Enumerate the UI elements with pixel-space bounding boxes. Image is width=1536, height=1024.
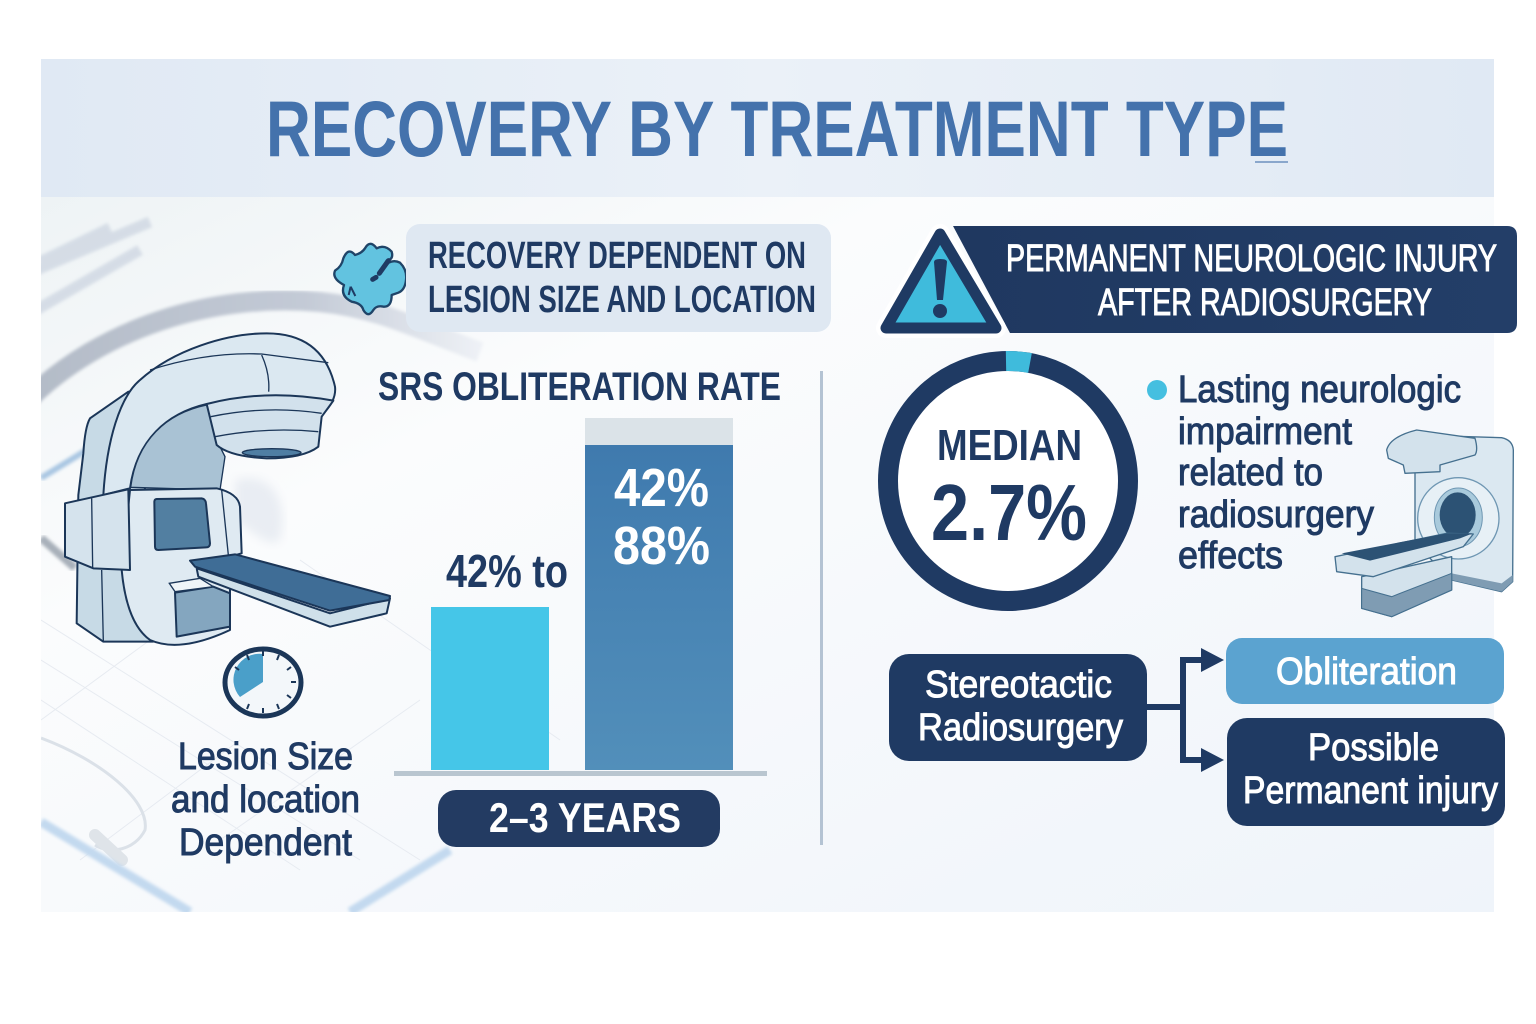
icon: linear accelerator [65, 333, 390, 645]
label: lesion size and location dependent: Dependent [179, 822, 352, 864]
panel: body background [30, 197, 1494, 912]
donut chart: median 2.7% [888, 361, 1128, 601]
flow box: stereotactic radiosurgery: Radiosurgery [918, 707, 1123, 749]
bullet text: lasting neurologic impairment [1147, 369, 1461, 577]
bar: higher value [585, 418, 733, 770]
panel: recovery dependent callout: RECOVERY DEPENDENT ON [428, 235, 806, 277]
icon: warning triangle [886, 234, 996, 328]
bullet text: lasting neurologic impairment: effects [1178, 535, 1283, 577]
pill: 2-3 years: 2–3 YEARS [489, 794, 681, 841]
title: RECOVERY BY TREATMENT TYPE [266, 84, 1288, 173]
header band [41, 59, 1494, 197]
icon: clock [225, 649, 301, 716]
bullet text: lasting neurologic impairment: impairment [1178, 411, 1352, 453]
bar: lower value [431, 607, 549, 770]
label: lesion size and location dependent: and location [171, 779, 360, 821]
flow box: stereotactic radiosurgery: Stereotactic [925, 664, 1112, 706]
label: lesion size and location dependent [171, 736, 360, 864]
donut chart: median 2.7%: MEDIAN [937, 421, 1082, 470]
arrows: branching connector [1147, 648, 1224, 772]
label: lesion size and location dependent: Lesion Size [178, 736, 353, 778]
bullet text: lasting neurologic impairment: radiosurgery [1178, 494, 1374, 536]
panel: recovery dependent callout: LESION SIZE AND LOCATION [428, 279, 816, 321]
icon: lesion blob [334, 244, 406, 314]
value label: 42% to: 42% to [446, 545, 568, 597]
value label: 42% 88% [613, 458, 710, 576]
banner: permanent neurologic injury: AFTER RADIOSURGERY [1098, 282, 1432, 324]
flow box: possible permanent injury: Possible [1308, 727, 1439, 769]
value label: 42% 88%: 88% [613, 516, 710, 576]
flow box: stereotactic radiosurgery [889, 654, 1147, 761]
flow box: obliteration [1226, 638, 1504, 704]
icon: scanner machine [1335, 430, 1513, 617]
bullet text: lasting neurologic impairment: Lasting neurologic [1178, 369, 1461, 411]
panel: recovery dependent callout [406, 224, 831, 332]
flow box: obliteration: Obliteration [1276, 651, 1457, 693]
donut chart: median 2.7%: 2.7% [931, 468, 1087, 557]
bullet text: lasting neurologic impairment: related to [1178, 452, 1323, 494]
pill: 2-3 years [438, 790, 720, 847]
heading: SRS obliteration rate: SRS OBLITERATION RATE [378, 365, 781, 409]
value label: 42% 88%: 42% [614, 458, 709, 518]
flow box: possible permanent injury [1227, 718, 1505, 826]
banner: permanent neurologic injury [953, 226, 1517, 333]
bar chart: SRS obliteration [394, 418, 767, 776]
flow box: possible permanent injury: Permanent injury [1243, 770, 1498, 812]
